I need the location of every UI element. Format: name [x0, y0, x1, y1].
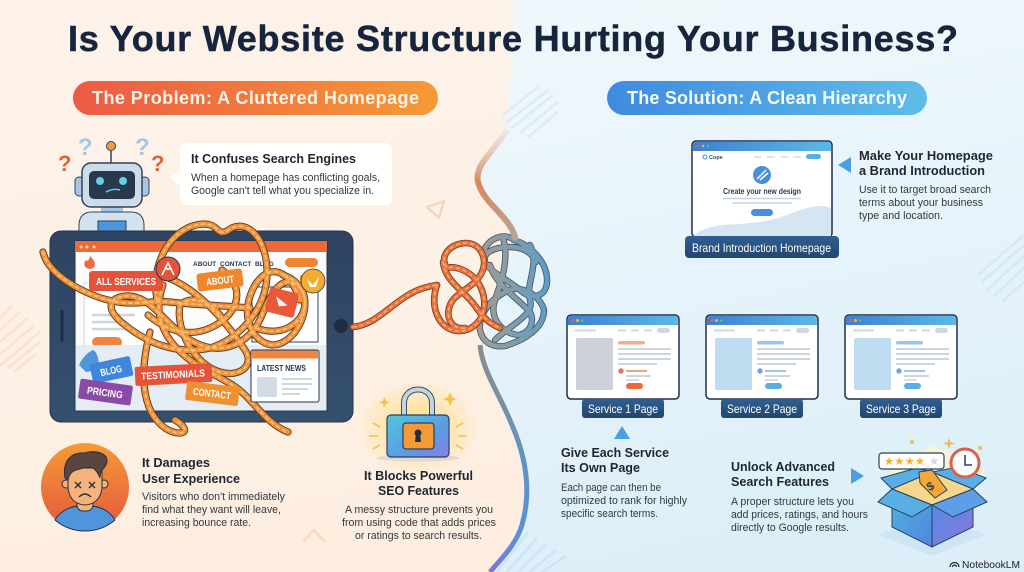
- text: unlock advanced search features: Unlock Advanced: [731, 459, 835, 474]
- navigation tag: contact: CONTACT: [192, 387, 231, 402]
- text: it blocks powerful seo features: It Blocks Powerful: [364, 468, 473, 483]
- tangled rope over page: [43, 224, 305, 433]
- icon: flame logo: [84, 256, 95, 269]
- small chevron decoration: [303, 530, 325, 542]
- text: it damages user experience: increasing bounce rate.: [142, 517, 251, 529]
- NotebookLM watermark: NotebookLM: [962, 559, 1020, 571]
- navigation tag: testimonials: TESTIMONIALS: [141, 368, 206, 383]
- text: give each service its own page: optimized to rank for highly: [561, 495, 687, 507]
- tablet with cluttered homepage: ABOUT: [193, 261, 216, 268]
- text: it damages user experience: User Experience: [142, 471, 240, 486]
- icon: padlock: [358, 380, 478, 476]
- service 3 page: Service 3 Page: [866, 402, 936, 416]
- tablet with cluttered homepage: [50, 231, 353, 422]
- callout: it confuses search engines: [170, 143, 392, 205]
- navigation tag: blog: [89, 356, 134, 384]
- text: unlock advanced search features: A proper structure lets you: [731, 496, 854, 508]
- brand homepage window: Cope: [709, 155, 723, 161]
- brand homepage label: [685, 236, 839, 258]
- navigation tag: pricing: [78, 378, 133, 406]
- icon: sad user avatar: [41, 443, 129, 531]
- rope connecting tablet to knot: [353, 243, 500, 331]
- text: it damages user experience: It Damages: [142, 455, 210, 470]
- navigation tag: pricing: PRICING: [86, 386, 124, 401]
- icon: confused robot: ?: [151, 151, 164, 176]
- text: it damages user experience: Visitors who don't immediately: [142, 491, 285, 503]
- navigation tag: about: [196, 268, 244, 292]
- icon: confused robot: ?: [78, 134, 93, 161]
- text: it blocks powerful seo features: from using code that adds prices: [342, 517, 496, 529]
- icon: confused robot: [58, 134, 164, 231]
- text: make your homepage a brand introduction: type and location.: [859, 210, 943, 222]
- right blue background panel: [478, 0, 1024, 572]
- text: it damages user experience: [142, 455, 285, 529]
- arrow pointing to homepage: [838, 157, 851, 173]
- text: it blocks powerful seo features: [342, 468, 496, 542]
- rating card: ★: [929, 456, 939, 468]
- service 1 page: [567, 315, 679, 418]
- navigation tag: about: ABOUT: [206, 274, 235, 289]
- service 1 page: Service 1 Page: [588, 402, 658, 416]
- heading pill: the solution: The Solution: A Clean Hierarchy: [627, 88, 907, 108]
- text: unlock advanced search features: directly to Google results.: [731, 522, 849, 534]
- icon: yellow circle badge: [301, 269, 325, 293]
- price tag: $: [924, 478, 937, 494]
- navigation tag: contact: [185, 381, 240, 406]
- service 2 page: [706, 315, 818, 418]
- navigation tag: blog: BLOG: [99, 364, 123, 379]
- text: make your homepage a brand introduction: [859, 148, 993, 222]
- brand homepage window: Create your new design: [723, 186, 801, 196]
- text: it blocks powerful seo features: A messy structure prevents you: [345, 504, 493, 516]
- service 2 page: Service 2 Page: [727, 402, 797, 416]
- arrow pointing to box: [851, 468, 864, 484]
- heading pill: the problem: [73, 81, 438, 115]
- text: give each service its own page: specific search terms.: [561, 508, 658, 520]
- tablet with cluttered homepage: BLOG: [255, 261, 274, 268]
- latest news card: [251, 350, 319, 402]
- left content panel: [84, 283, 164, 347]
- text: make your homepage a brand introduction: a Brand Introduction: [859, 163, 985, 178]
- lower page background: [76, 345, 326, 410]
- brand homepage label: Brand Introduction Homepage: [692, 241, 831, 255]
- text: give each service its own page: Its Own Page: [561, 460, 640, 475]
- text: give each service its own page: Give Each Service: [561, 445, 669, 460]
- text: make your homepage a brand introduction: Use it to target broad search: [859, 184, 991, 196]
- navigation tag: all services: [89, 271, 163, 291]
- text: unlock advanced search features: add prices, ratings, and hours: [731, 509, 868, 521]
- icon: blue leaf: [79, 350, 99, 372]
- heading pill: the problem: The Problem: A Cluttered Homepage: [92, 88, 419, 108]
- callout: it confuses search engines: Google can't tell what you specialize in.: [191, 185, 374, 197]
- title: Is Your Website Structure Hurting Your Business?: [68, 18, 958, 59]
- heading pill: the solution: [607, 81, 927, 115]
- icon: red square badge: [264, 287, 299, 318]
- thread rising out of knot: [478, 130, 516, 240]
- clock: [951, 449, 979, 477]
- icon: confused robot: ?: [135, 134, 150, 161]
- text: it blocks powerful seo features: SEO Features: [378, 483, 459, 498]
- service 3 page: [845, 315, 957, 418]
- icon: confused robot: ?: [58, 151, 71, 176]
- navigation tag: testimonials: [135, 363, 212, 386]
- navigation tag: all services: ALL SERVICES: [96, 277, 156, 288]
- latest news card: LATEST NEWS: [257, 363, 306, 373]
- right content panel: [252, 287, 318, 342]
- rating card: [879, 453, 944, 469]
- text: unlock advanced search features: [731, 459, 868, 534]
- callout: it confuses search engines: When a homepage has conflicting goals,: [191, 172, 380, 184]
- thread descending from knot: [480, 345, 527, 572]
- small triangle decoration: [427, 201, 444, 218]
- text: give each service its own page: Each page can then be: [561, 482, 661, 494]
- text: unlock advanced search features: Search Features: [731, 474, 829, 489]
- text: give each service its own page: [561, 445, 687, 520]
- text: make your homepage a brand introduction: terms about your business: [859, 197, 983, 209]
- brand homepage window: [692, 141, 832, 237]
- callout: it confuses search engines: It Confuses Search Engines: [191, 151, 356, 166]
- knot transitioning to blue: [480, 236, 547, 346]
- icon: red circle badge: [156, 257, 180, 281]
- arrow pointing up to service 1: [614, 426, 630, 439]
- text: it damages user experience: find what they want will leave,: [142, 504, 281, 516]
- icon: open box with rating, price tag and clock: [878, 438, 987, 556]
- tablet with cluttered homepage: CONTACT: [220, 261, 251, 268]
- rating card: ★★★★: [884, 456, 925, 468]
- text: it blocks powerful seo features: or ratings to search results.: [355, 530, 482, 542]
- text: make your homepage a brand introduction: Make Your Homepage: [859, 148, 993, 163]
